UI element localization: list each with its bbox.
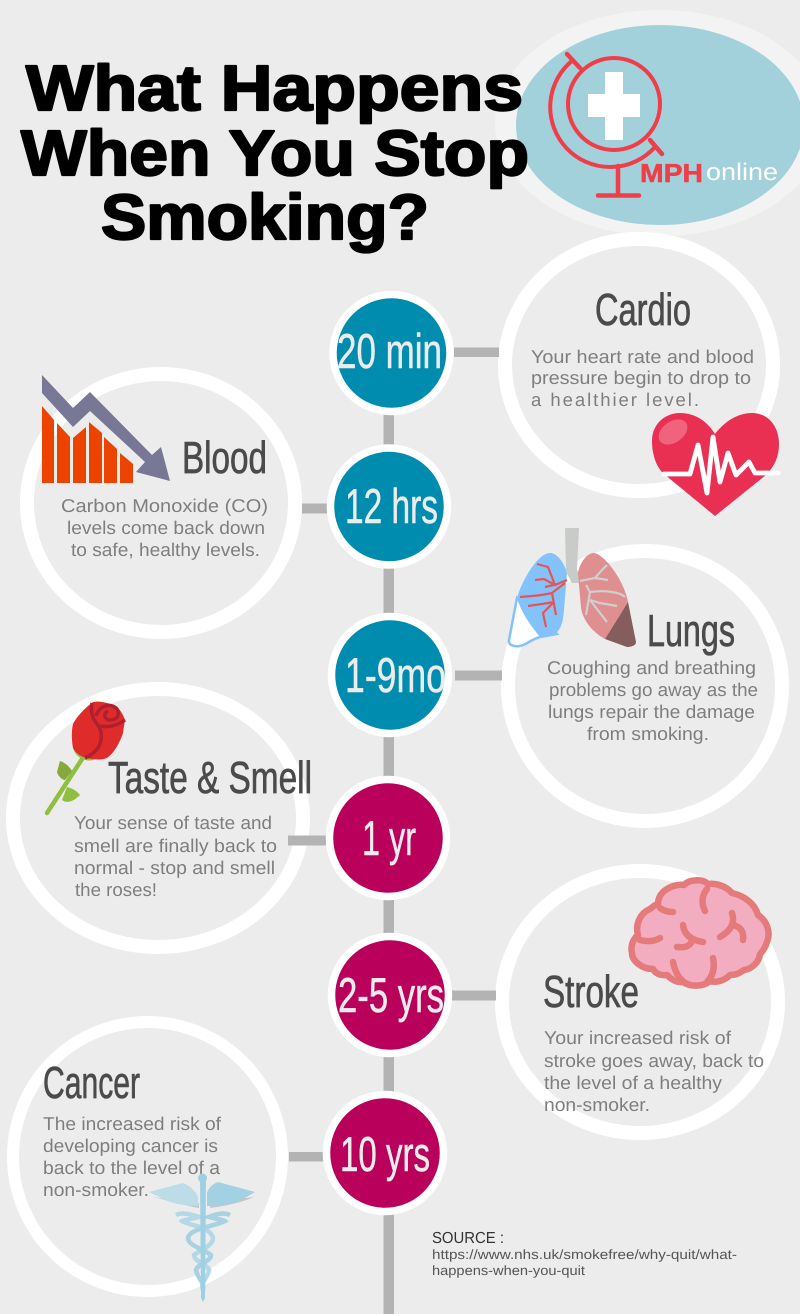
title: What Happens xyxy=(26,52,523,124)
source: happens-when-you-quit xyxy=(432,1263,585,1278)
panel: cancer: The increased risk of xyxy=(43,1113,222,1134)
milestone: 12 hrs: 12 hrs xyxy=(345,480,438,534)
icon: caduceus xyxy=(149,1174,255,1302)
panel: taste and smell xyxy=(13,689,326,947)
panel: cardio: a healthier level. xyxy=(531,389,699,410)
panel: lungs: Lungs xyxy=(647,605,735,656)
title xyxy=(21,52,529,253)
panel: blood: levels come back down xyxy=(67,517,265,538)
panel: blood: Carbon Monoxide (CO) xyxy=(61,495,268,516)
milestone: 1 yr xyxy=(330,780,446,896)
panel: lungs: lungs repair the damage xyxy=(548,701,755,722)
panel: cancer: developing cancer is xyxy=(43,1135,218,1156)
panel: taste and smell: smell are finally back to xyxy=(74,835,277,856)
panel: lungs: from smoking. xyxy=(587,723,709,744)
panel: cancer: back to the level of a xyxy=(43,1157,221,1178)
panel: cancer: non-smoker. xyxy=(43,1179,149,1200)
panel: stroke: non-smoker. xyxy=(544,1094,650,1115)
milestone: 10 yrs: 10 yrs xyxy=(340,1128,430,1182)
milestone: 20 min: 20 min xyxy=(337,325,442,379)
panel: stroke: Stroke xyxy=(543,966,639,1017)
source: https://www.nhs.uk/smokefree/why-quit/what- xyxy=(432,1247,737,1262)
panel: cardio: Your heart rate and blood xyxy=(531,346,754,367)
milestone: 12 hrs xyxy=(330,448,448,565)
milestone: 1 yr: 1 yr xyxy=(362,812,416,866)
milestone: 2-5 yrs: 2-5 yrs xyxy=(338,969,444,1023)
panel: stroke xyxy=(451,871,778,1133)
milestone: 1-9mo xyxy=(332,616,448,734)
logo xyxy=(495,10,800,236)
source xyxy=(432,1230,737,1278)
icon: brain xyxy=(631,880,769,986)
panel: taste and smell: Taste & Smell xyxy=(108,752,312,803)
panel: cancer: Cancer xyxy=(43,1057,140,1108)
panel: lungs xyxy=(455,528,782,821)
panel: cardio xyxy=(454,239,779,516)
panel: cardio: pressure begin to drop to xyxy=(531,367,751,388)
panel: blood: Blood xyxy=(182,432,267,483)
panel: stroke: Your increased risk of xyxy=(544,1027,732,1048)
timeline line xyxy=(384,400,394,1314)
milestone: 10 yrs xyxy=(326,1094,444,1212)
panel: blood: to safe, healthy levels. xyxy=(71,539,260,560)
panel: cardio: Cardio xyxy=(595,284,691,335)
panel: stroke: the level of a healthy xyxy=(544,1072,723,1093)
icon: falling chart xyxy=(42,375,170,483)
source: SOURCE : xyxy=(432,1230,504,1247)
milestone: 20 min xyxy=(333,294,450,412)
icon: heart xyxy=(652,413,779,516)
panel: cancer xyxy=(13,1022,325,1302)
panel: taste and smell: Your sense of taste and xyxy=(74,812,272,833)
panel: blood xyxy=(27,374,330,632)
panel: taste and smell: normal - stop and smell xyxy=(74,857,275,878)
panel: stroke: stroke goes away, back to xyxy=(544,1050,764,1071)
title: Smoking? xyxy=(101,181,429,253)
milestone: 2-5 yrs xyxy=(332,936,448,1054)
panel: lungs: Coughing and breathing xyxy=(547,657,756,678)
panel: taste and smell: the roses! xyxy=(75,879,157,900)
logo: MPH xyxy=(640,158,703,188)
icon: rose xyxy=(47,702,125,813)
title: When You Stop xyxy=(21,117,529,189)
milestone: 1-9mo: 1-9mo xyxy=(345,649,446,703)
icon: lungs xyxy=(509,528,636,647)
logo: online xyxy=(706,159,778,186)
panel: lungs: problems go away as the xyxy=(549,679,758,700)
